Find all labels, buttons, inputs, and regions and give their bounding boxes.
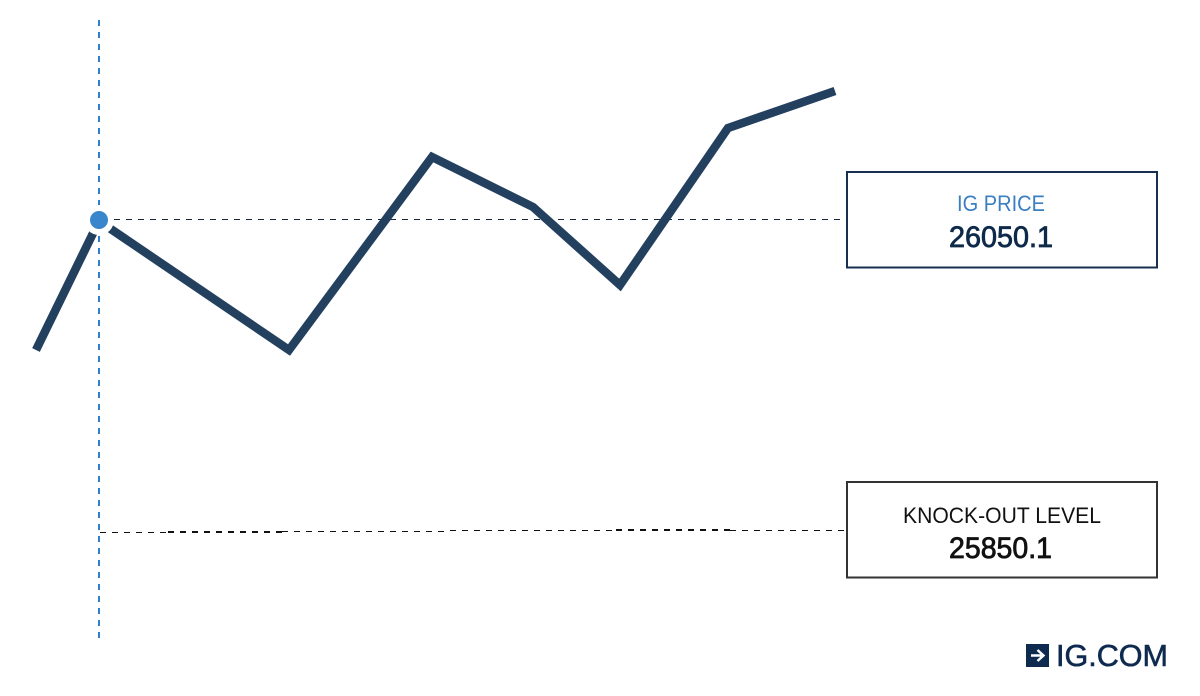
icon: logo arrow square <box>1026 644 1049 667</box>
callout: knock-out level <box>847 482 1157 578</box>
vertical dashed time marker <box>98 20 100 638</box>
dashed line: IG price level <box>114 218 846 220</box>
entry point marker <box>84 205 114 235</box>
logo: IG.COM <box>1026 639 1168 673</box>
value: IG price: 26050.1 <box>949 221 1053 254</box>
callout: IG price <box>847 172 1157 268</box>
dashed line: knock-out level <box>100 530 846 532</box>
label: IG price: IG PRICE <box>957 191 1045 216</box>
price line chart <box>36 91 835 350</box>
label: knock-out level: KNOCK-OUT LEVEL <box>903 503 1101 528</box>
value: knock-out level: 25850.1 <box>949 532 1052 565</box>
logo wordmark: IG.COM <box>1056 639 1168 673</box>
